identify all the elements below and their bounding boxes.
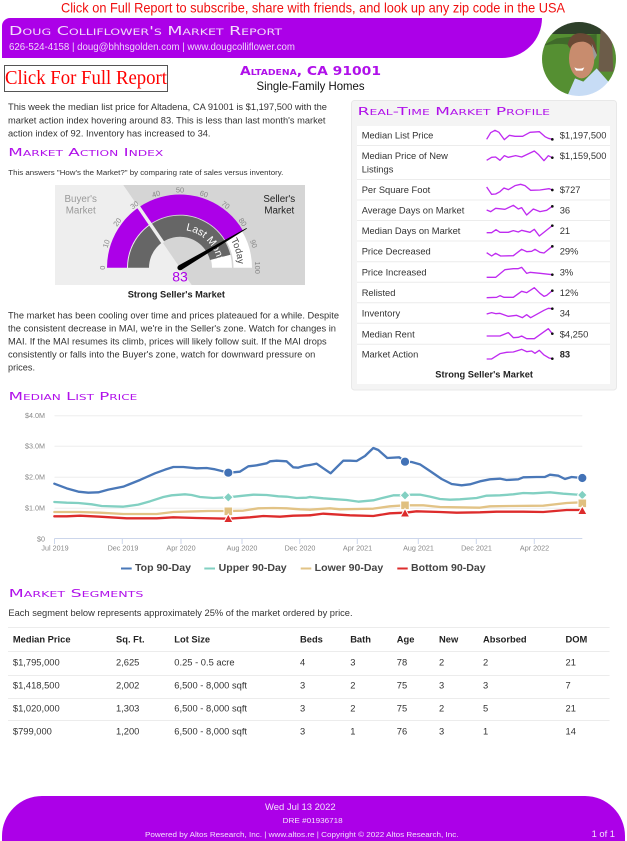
profile metric labels: Price Decreased	[362, 247, 431, 257]
market action gauge: 70	[220, 199, 232, 211]
x axis labels: Apr 2022	[520, 544, 549, 553]
series: upper 90-day	[54, 492, 582, 507]
heading: market segments: Market Segments	[9, 587, 143, 600]
table row 4: 3	[439, 726, 444, 736]
chart legend: Top 90-Day	[135, 563, 191, 574]
line chart: median list price	[25, 411, 587, 574]
heading: median list price: Median List Price	[9, 390, 137, 403]
market action gauge: 50	[176, 186, 184, 195]
table header: Lot Size	[174, 634, 210, 644]
table row 4: 76	[397, 726, 407, 736]
profile metric values: 34	[560, 309, 570, 319]
y axis labels: $0	[37, 534, 45, 543]
table row 3: 5	[483, 704, 488, 714]
y axis labels: $1.0M	[25, 504, 45, 512]
chart legend: Lower 90-Day	[315, 563, 384, 574]
x axis labels: Aug 2021	[403, 544, 434, 553]
gauge subtitle: This answers "How's the Market?" by comparing rate of sales versus inventory.	[8, 168, 283, 177]
table row 4: 1	[350, 726, 355, 736]
table row 1: 0.25 - 0.5 acre	[174, 658, 235, 668]
table header: Beds	[300, 634, 323, 644]
table row 2	[13, 680, 571, 690]
market action gauge: 20	[111, 216, 123, 228]
table row 1: 78	[397, 658, 407, 668]
header banner: 626-524-4158 | doug@bhhsgolden.com | www.dougcolliflower.com	[9, 42, 295, 53]
profile metric labels: Per Square Foot	[362, 185, 431, 195]
location title	[240, 64, 381, 93]
profile metric values: $4,250	[560, 329, 588, 339]
table row 4: 3	[300, 726, 305, 736]
analysis paragraph: MAI. If the MAI resumes its climb, prices will likely follow suit. If the MAI drops	[8, 336, 327, 346]
market segments table	[8, 628, 610, 736]
intro paragraph: action index of 92. Inventory has increased to 34.	[8, 128, 210, 138]
profile metric labels: Median List Price	[362, 130, 433, 140]
profile metric labels: Average Days on Market	[362, 206, 465, 216]
table row 4: $799,000	[13, 726, 52, 736]
header banner	[2, 18, 542, 58]
table row 1: 2	[439, 658, 444, 668]
table row 4: 1	[483, 726, 488, 736]
market action gauge: 83	[172, 269, 188, 285]
market action gauge: Buyer's	[65, 194, 97, 205]
chart legend: Upper 90-Day	[219, 563, 287, 574]
table row 2: $1,418,500	[13, 680, 60, 690]
heading: real-time market profile: Real-Time Market Profile	[358, 105, 550, 118]
table row 2: 3	[483, 680, 488, 690]
profile metric labels: Median Days on Market	[362, 226, 461, 236]
profile metric values: 12%	[560, 288, 578, 298]
table row 2: 2	[350, 680, 355, 690]
table row 3	[13, 704, 576, 714]
table header: New	[439, 634, 459, 644]
profile metric values: 83	[560, 350, 570, 360]
x axis labels: Dec 2021	[461, 544, 492, 553]
table row 3: 75	[397, 704, 407, 714]
analysis paragraph: The market has been cooling over time and prices plateaued for a while. Despite	[8, 310, 339, 320]
table row 2: 75	[397, 680, 407, 690]
header banner: Doug Colliflower's Market Report	[9, 23, 283, 38]
table header: DOM	[566, 634, 588, 644]
profile metric values	[560, 130, 606, 360]
table row 1: 2	[483, 658, 488, 668]
market action gauge: Last Month	[186, 223, 224, 258]
series: bottom 90-day	[54, 510, 582, 519]
y axis labels	[25, 411, 45, 543]
footer: Powered by Altos Research, Inc. | www.altos.re | Copyright © 2022 Altos Research, Inc.	[145, 830, 459, 839]
footer: 1 of 1	[592, 829, 615, 839]
analysis paragraph: consistently or falls into the Buyer's zone, watch for downward pressure on	[8, 350, 315, 360]
market action gauge: 80	[237, 216, 249, 228]
profile metric values: $1,197,500	[560, 130, 606, 140]
table row 4: 14	[566, 726, 576, 736]
market action gauge: 10	[101, 238, 112, 249]
x axis labels	[41, 544, 549, 553]
table row 4: 1,200	[116, 726, 139, 736]
footer: Wed Jul 13 2022	[265, 802, 336, 812]
x axis labels: Jul 2019	[41, 544, 69, 553]
table header: Age	[397, 634, 414, 644]
market action gauge	[55, 185, 305, 285]
market action gauge: 90	[248, 238, 259, 249]
chart legend	[121, 563, 486, 574]
series: top 90-day	[54, 448, 582, 493]
profile metric labels: Relisted	[362, 288, 395, 298]
profile metric labels: Inventory	[362, 309, 400, 319]
x axis labels: Apr 2021	[343, 544, 372, 553]
profile metric values: 21	[560, 226, 570, 236]
sparklines lower rows	[487, 245, 554, 360]
table row 2: 2,002	[116, 680, 139, 690]
market action gauge: Seller's	[263, 194, 295, 205]
y axis labels: $3.0M	[25, 442, 45, 451]
table row 3: 2	[439, 704, 444, 714]
location title: Altadena, CA 91001	[240, 64, 381, 78]
market action gauge: 60	[199, 188, 209, 200]
analysis paragraph	[8, 310, 339, 373]
table row 1: 4	[300, 658, 305, 668]
table row 2: 3	[300, 680, 305, 690]
intro paragraph: This week the median list price for Altadena, CA 91001 is $1,197,500 with the	[8, 102, 327, 112]
profile metric labels: Median Rent	[362, 329, 415, 339]
table header	[13, 634, 588, 644]
table header: Bath	[350, 634, 371, 644]
profile metric labels	[362, 130, 465, 360]
table row 3: $1,020,000	[13, 704, 60, 714]
footer	[2, 796, 625, 841]
table row 1: $1,795,000	[13, 658, 60, 668]
profile metric values: 3%	[560, 267, 573, 277]
table row 4	[13, 726, 576, 736]
table row 3: 1,303	[116, 704, 139, 714]
market action gauge: 30	[128, 199, 140, 211]
table header: Absorbed	[483, 634, 527, 644]
sparklines upper rows	[487, 130, 554, 236]
market action gauge: Market	[264, 206, 295, 217]
table row 3: 6,500 - 8,000 sqft	[174, 704, 247, 714]
heading: market action index: Market Action Index	[8, 146, 164, 159]
gauge caption: Strong Seller's Market	[128, 289, 225, 299]
x axis labels: Apr 2020	[166, 544, 196, 553]
table row 3: 21	[566, 704, 576, 714]
analysis paragraph: the consistent decrease in MAI, we're in the Seller's zone. Watch for changes in	[8, 324, 336, 334]
x axis labels: Aug 2020	[227, 544, 257, 553]
profile metric labels: Market Action	[362, 350, 418, 360]
table row 2: 7	[566, 680, 571, 690]
x axis labels: Dec 2019	[108, 544, 138, 553]
market action gauge: Today	[232, 237, 243, 264]
location title: Single-Family Homes	[256, 79, 364, 93]
analysis paragraph: prices.	[8, 363, 35, 373]
x axis labels: Dec 2020	[285, 544, 315, 553]
profile verdict: Strong Seller's Market	[435, 370, 533, 380]
profile metric labels: Listings	[362, 164, 394, 174]
table header: Median Price	[13, 634, 71, 644]
profile metric values: 29%	[560, 247, 578, 257]
y axis labels: $4.0M	[25, 411, 45, 420]
market action gauge: 100	[253, 262, 262, 274]
intro paragraph	[8, 102, 327, 138]
series: lower 90-day	[54, 502, 582, 514]
market action gauge: Market	[66, 206, 96, 217]
segments intro: Each segment below represents approximately 25% of the market ordered by price.	[8, 608, 353, 618]
footer: DRE #01936718	[283, 816, 343, 825]
series markers	[224, 457, 587, 522]
table row 3: 2	[350, 704, 355, 714]
table row 4: 6,500 - 8,000 sqft	[174, 726, 247, 736]
table row 1: 2,625	[116, 658, 139, 668]
table row 1	[13, 658, 576, 668]
intro paragraph: market action index hovering around 83. This is less than last month's market	[8, 116, 326, 126]
profile metric labels: Median Price of New	[362, 151, 448, 161]
y axis labels: $2.0M	[25, 472, 45, 482]
panel: real-time market profile	[352, 100, 616, 390]
profile metric values: $1,159,500	[560, 151, 606, 161]
market action gauge: 40	[151, 188, 161, 200]
table row 1: 3	[350, 658, 355, 668]
chart legend: Bottom 90-Day	[411, 563, 486, 574]
table row 2: 6,500 - 8,000 sqft	[174, 680, 247, 690]
table row 2: 3	[439, 680, 444, 690]
profile metric values: $727	[560, 185, 580, 195]
profile metric values: 36	[560, 206, 570, 216]
table header: Sq. Ft.	[116, 634, 145, 644]
market action gauge: 0	[98, 266, 107, 270]
agent photo	[542, 22, 616, 96]
table row 1: 21	[566, 658, 576, 668]
profile metric labels: Price Increased	[362, 267, 427, 277]
table row 3: 3	[300, 704, 305, 714]
click for full report button: Click For Full Report	[5, 67, 167, 89]
